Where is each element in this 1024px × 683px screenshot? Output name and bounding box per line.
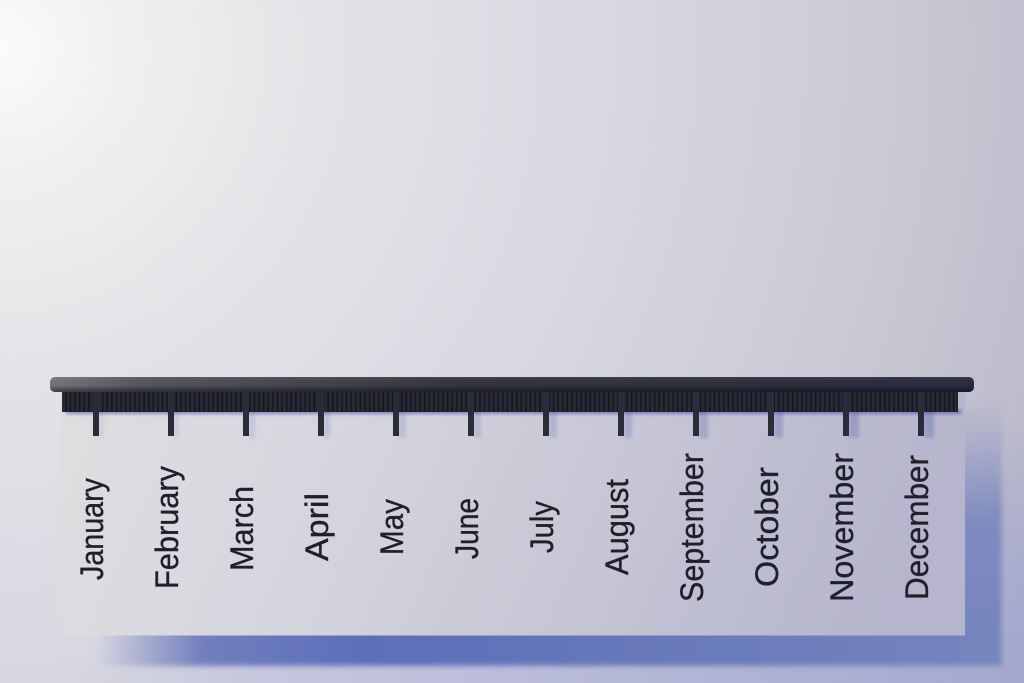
calendar sheet (60, 392, 965, 636)
tick shadows (99, 410, 934, 438)
month labels: January (74, 478, 110, 580)
binding bristles (62, 391, 958, 412)
month labels: September (674, 453, 710, 602)
month labels: October (749, 467, 785, 587)
month tick marks (93, 392, 924, 436)
bristle shadow (66, 409, 961, 414)
month labels: April (299, 493, 335, 561)
month labels: February (149, 466, 185, 589)
month labels: December (899, 455, 935, 600)
month labels: June (449, 498, 485, 559)
month labels: May (374, 499, 410, 555)
month labels: July (524, 501, 560, 553)
month labels (74, 453, 935, 602)
paper shadow (95, 398, 1002, 666)
wall tint right of the shadow (1002, 420, 1024, 683)
floor tint below the shadow (60, 664, 1024, 683)
month labels: March (224, 486, 260, 571)
hanging bar (50, 377, 974, 392)
month labels: November (824, 453, 860, 602)
month labels: August (599, 479, 635, 575)
